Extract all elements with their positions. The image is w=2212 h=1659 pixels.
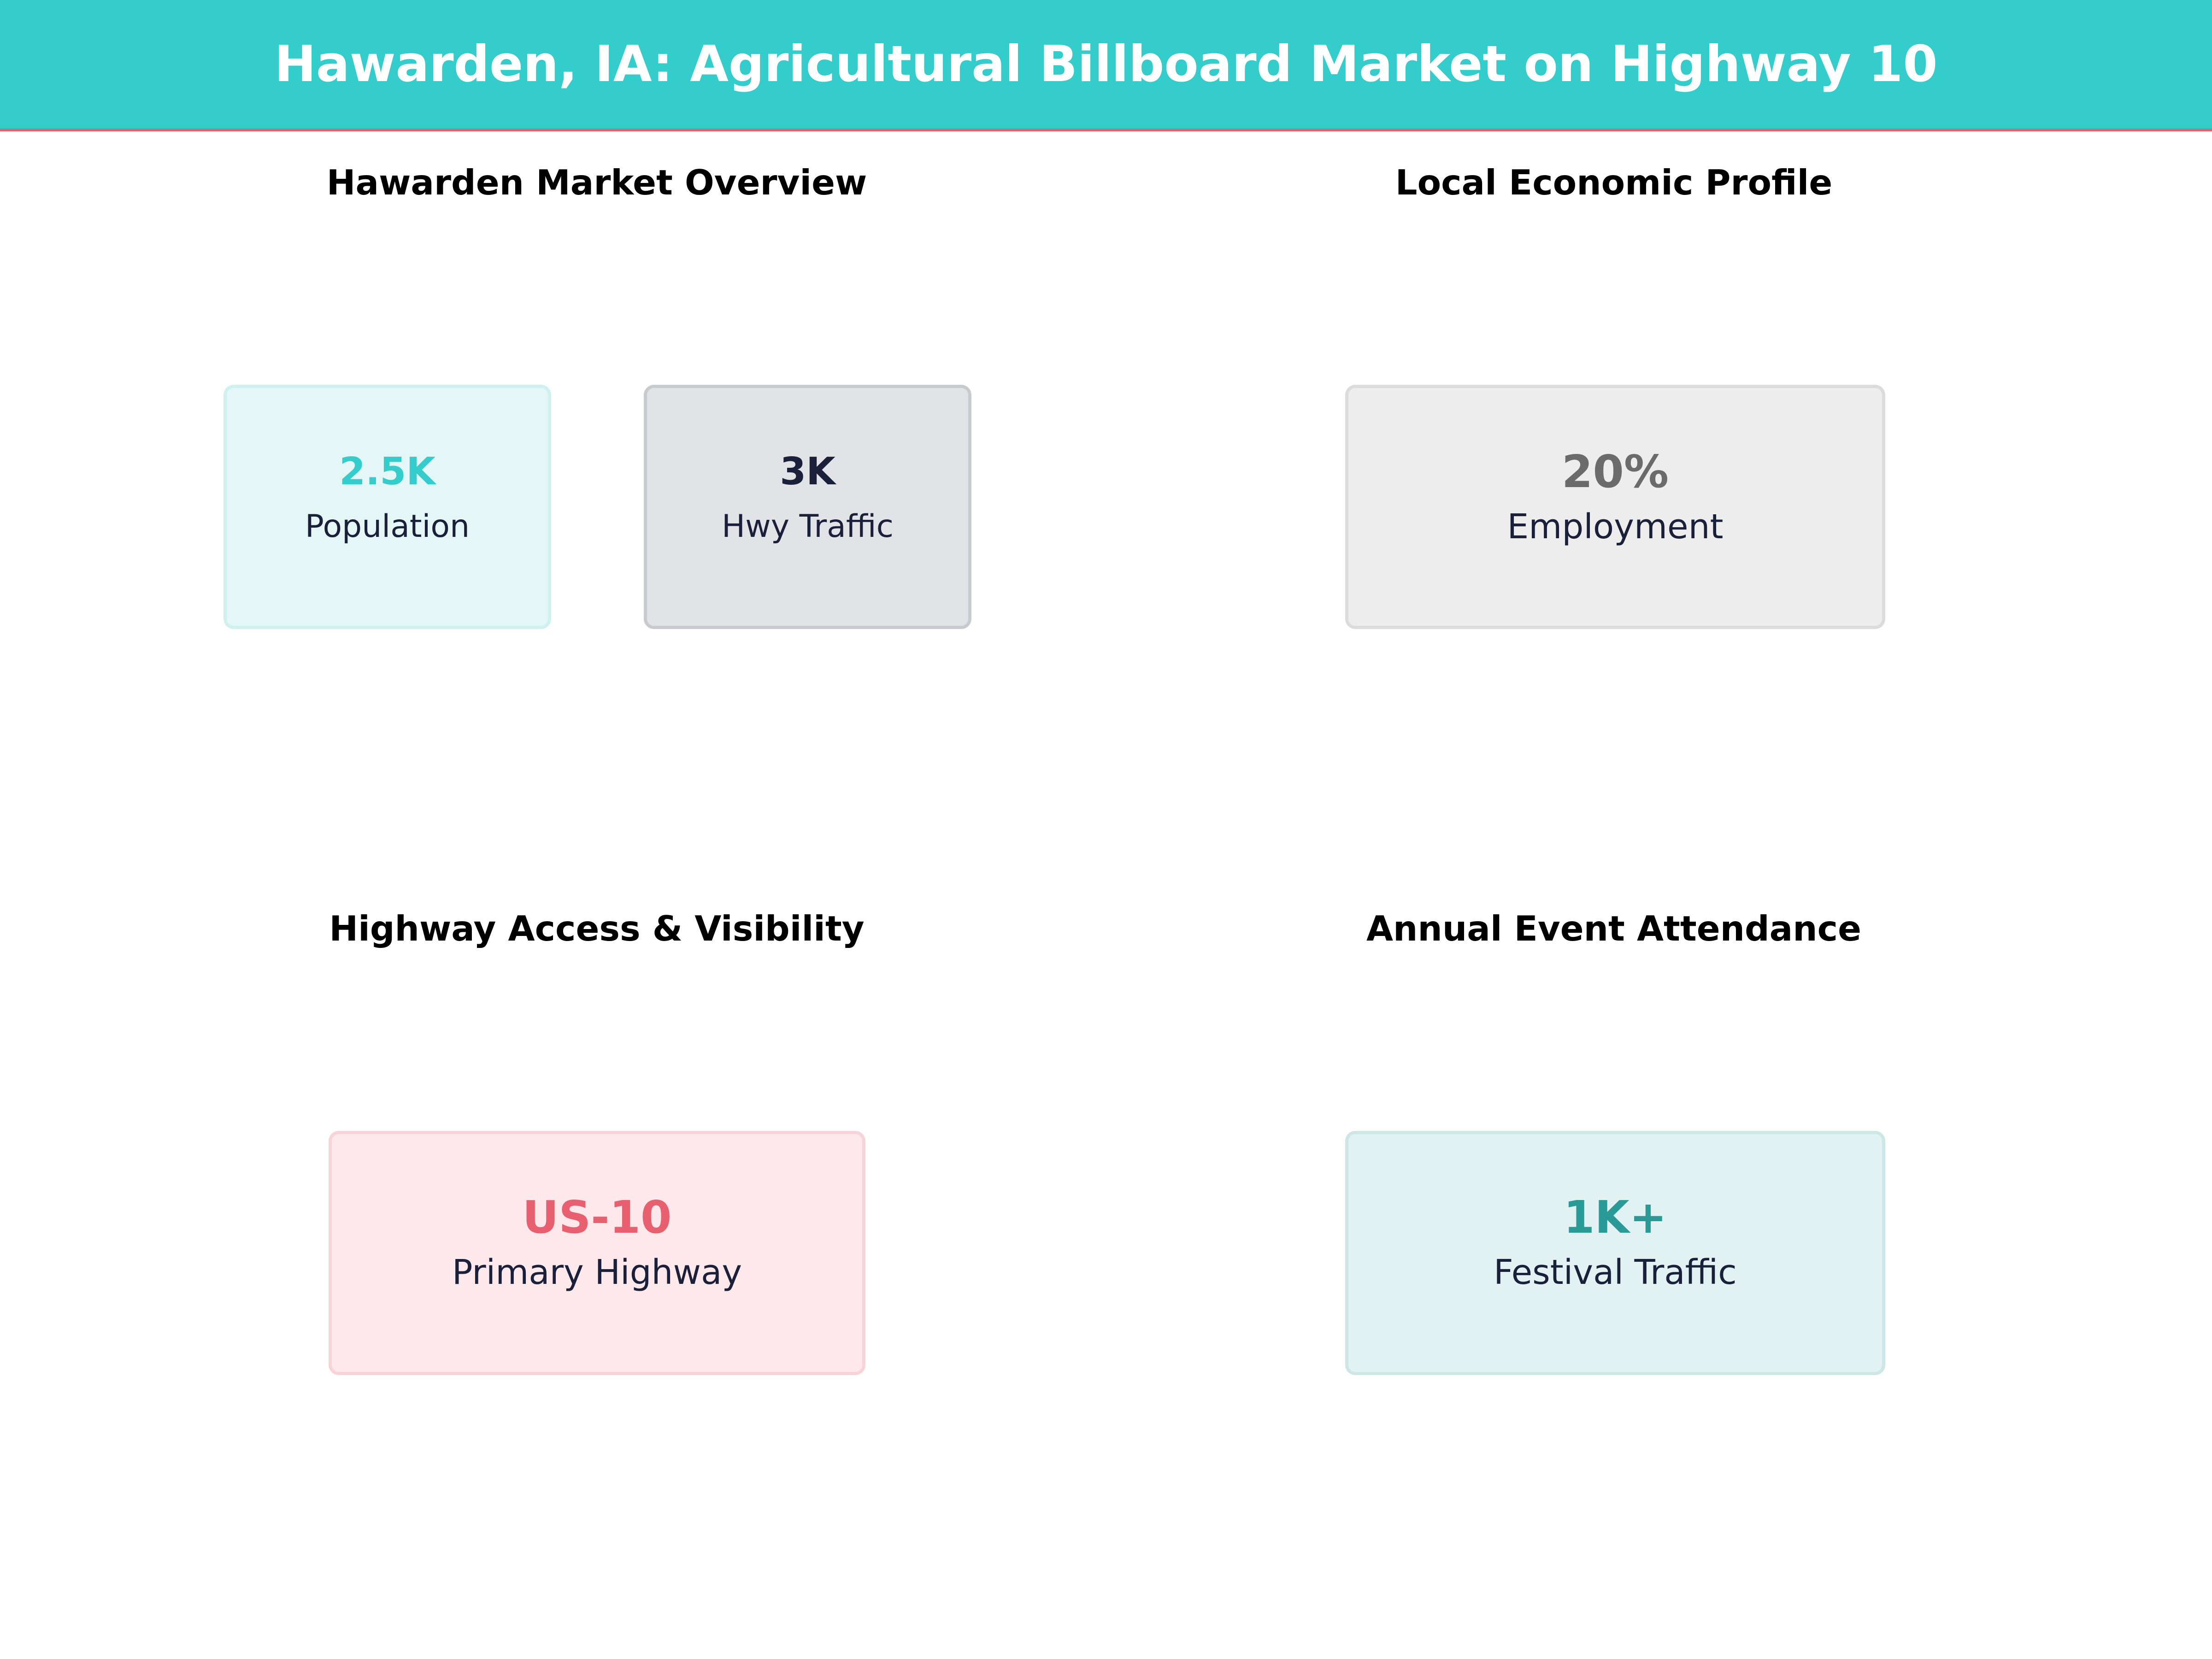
card: Festival Traffic <box>1345 1131 1885 1375</box>
card: Hwy Traffic: 3K <box>780 450 835 494</box>
card: Employment: Employment <box>1507 507 1723 547</box>
heading: Local Economic Profile: Local Economic Profile <box>1395 162 1832 203</box>
card: US-10: US-10 <box>523 1191 671 1243</box>
card: Population <box>224 385 551 629</box>
card: Hwy Traffic <box>644 385 971 629</box>
heading: Hawarden Market Overview: Hawarden Market Overview <box>327 162 867 203</box>
header banner <box>0 0 2212 131</box>
card: Population: 2.5K <box>339 450 435 494</box>
card: US-10 <box>329 1131 865 1375</box>
title: Hawarden, IA: Agricultural Billboard Market on Highway 10 <box>274 35 1938 93</box>
card: US-10: Primary Highway <box>452 1253 742 1292</box>
card: Employment: 20% <box>1562 446 1669 498</box>
card: Hwy Traffic: Hwy Traffic <box>722 508 894 545</box>
card: Population: Population <box>305 508 470 545</box>
card: Festival Traffic: Festival Traffic <box>1494 1253 1737 1292</box>
card: Employment <box>1345 385 1885 629</box>
heading: Highway Access & Visibility: Highway Access & Visibility <box>329 908 865 949</box>
card: Festival Traffic: 1K+ <box>1564 1191 1667 1243</box>
heading: Annual Event Attendance: Annual Event Attendance <box>1366 908 1861 949</box>
